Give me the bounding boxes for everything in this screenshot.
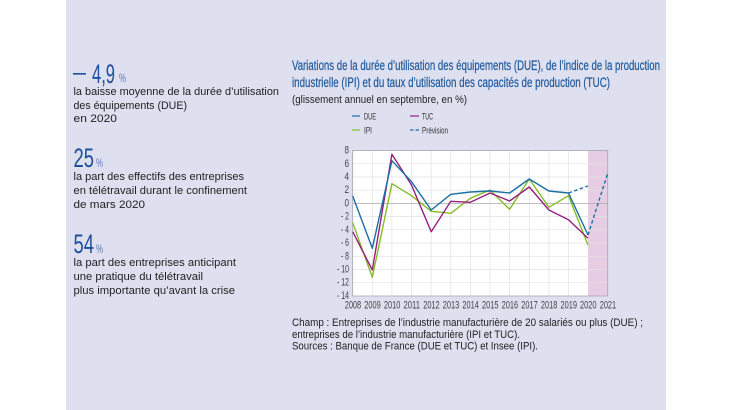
key figure: 4,9 %: la baisse moyenne de la durée d’utilisation bbox=[74, 86, 279, 98]
y axis labels: 2 bbox=[344, 184, 349, 196]
legend: DUE bbox=[364, 112, 376, 122]
y axis labels: 6 bbox=[344, 158, 349, 170]
x axis labels: 2017 bbox=[521, 300, 538, 312]
x axis labels: 2009 bbox=[364, 300, 381, 312]
y axis labels: - 6 bbox=[341, 237, 349, 249]
key figure: 4,9 % bbox=[73, 59, 279, 125]
x axis labels: 2021 bbox=[600, 300, 616, 312]
chart title bbox=[292, 58, 660, 90]
key figure: 4,9 %: en 2020 bbox=[74, 113, 117, 125]
series: DUE bbox=[353, 161, 588, 248]
source note: Champ : Entreprises de l’industrie manufacturière de 20 salariés ou plus (DUE) ; bbox=[292, 317, 643, 329]
legend bbox=[352, 112, 448, 136]
x axis labels: 2015 bbox=[482, 300, 498, 312]
y axis labels: - 10 bbox=[337, 264, 349, 276]
y axis labels: - 2 bbox=[341, 211, 349, 223]
y axis labels: - 8 bbox=[341, 250, 349, 262]
key figure: 4,9 %: des équipements (DUE) bbox=[74, 100, 187, 112]
line chart bbox=[337, 144, 616, 312]
key figure: 54 %: une pratique du télétravail bbox=[74, 271, 203, 283]
key figure: 25 %: 25 bbox=[74, 143, 94, 173]
key figure: 25 %: la part des effectifs des entreprises bbox=[74, 171, 244, 183]
key figure: 54 % bbox=[74, 229, 236, 297]
legend: Prévision bbox=[422, 126, 448, 136]
x axis labels: 2010 bbox=[384, 300, 400, 312]
key figure: 54 %: plus importante qu’avant la crise bbox=[74, 285, 235, 297]
source note: entreprises de l’industrie manufacturière (IPI et TUC). bbox=[292, 329, 520, 341]
x axis labels: 2013 bbox=[443, 300, 459, 312]
key figure: 54 %: 54 bbox=[74, 229, 94, 259]
series: forecast bbox=[568, 173, 608, 235]
y axis labels: - 12 bbox=[337, 277, 349, 289]
legend: IPI bbox=[364, 126, 372, 136]
y axis labels: 0 bbox=[344, 197, 349, 209]
x axis labels: 2012 bbox=[423, 300, 440, 312]
key figure: 25 %: en télétravail durant le confinement bbox=[74, 185, 247, 197]
plot area bbox=[353, 150, 608, 296]
series: IPI bbox=[353, 179, 588, 277]
x axis labels bbox=[345, 300, 616, 312]
legend: TUC bbox=[422, 112, 433, 122]
key figure: 4,9 %: % bbox=[119, 71, 126, 85]
source note: Sources : Banque de France (DUE et TUC) et Insee (IPI). bbox=[292, 340, 538, 352]
key figure: 4,9 %: 4,9 bbox=[92, 59, 115, 89]
source note bbox=[292, 317, 643, 352]
chart title: industrielle (IPI) et du taux d’utilisation des capacités de production (TUC) bbox=[292, 75, 610, 90]
chart subtitle: (glissement annuel en septembre, en %) bbox=[292, 94, 467, 106]
key figure: 54 %: % bbox=[96, 242, 103, 256]
series: TUC bbox=[353, 154, 588, 270]
y axis labels: - 4 bbox=[341, 224, 349, 236]
forecast band 2020-2021 bbox=[588, 150, 608, 296]
key figure: 54 %: la part des entreprises anticipant bbox=[74, 257, 236, 269]
x axis labels: 2016 bbox=[502, 300, 518, 312]
x axis labels: 2011 bbox=[404, 300, 420, 312]
x axis labels: 2014 bbox=[462, 300, 479, 312]
x axis labels: 2008 bbox=[345, 300, 361, 312]
key figure: 25 %: % bbox=[96, 156, 103, 170]
key figure: 25 % bbox=[74, 143, 247, 211]
y axis labels bbox=[337, 144, 349, 302]
y axis labels: - 14 bbox=[337, 290, 349, 302]
y axis labels: 8 bbox=[344, 144, 349, 156]
x axis labels: 2018 bbox=[541, 300, 557, 312]
y axis labels: 4 bbox=[344, 171, 349, 183]
x axis labels: 2020 bbox=[580, 300, 596, 312]
key figure: 25 %: de mars 2020 bbox=[74, 199, 145, 211]
x axis labels: 2019 bbox=[560, 300, 577, 312]
